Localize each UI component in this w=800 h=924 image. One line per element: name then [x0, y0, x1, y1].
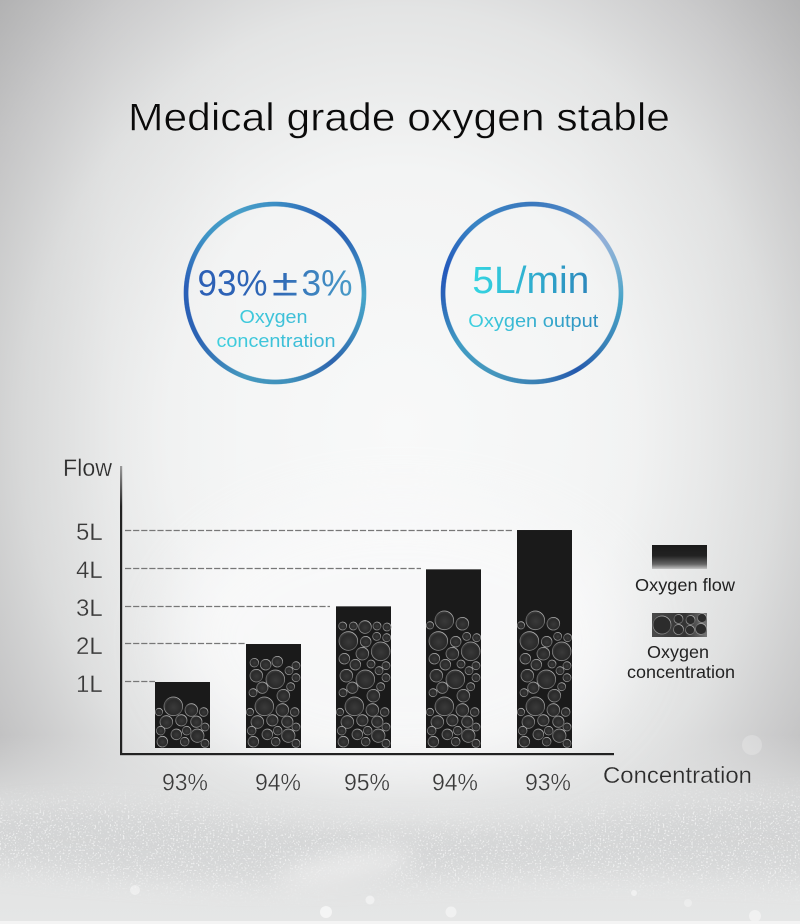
stat circle: oxygen output: Oxygen output — [468, 310, 598, 330]
stat circle: oxygen concentration — [184, 202, 366, 384]
y axis tick labels: 2L — [76, 633, 103, 660]
bar: 94% 2L — [246, 644, 301, 748]
legend: oxygen flow — [635, 545, 735, 595]
legend: oxygen concentration: concentration — [627, 662, 735, 682]
y axis tick labels — [76, 519, 103, 698]
y axis title: Flow — [63, 455, 113, 482]
title: Medical grade oxygen stable — [128, 96, 670, 140]
stat circle: oxygen output: 5L/min — [472, 260, 589, 302]
y axis tick labels: 4L — [76, 557, 103, 584]
y axis tick labels: 1L — [76, 671, 103, 698]
stat circle: oxygen concentration: Oxygen — [239, 306, 307, 326]
bar: 95% 3L — [336, 606, 391, 748]
legend: oxygen concentration — [627, 613, 735, 682]
x axis tick labels: 94% — [255, 770, 301, 796]
bar: 94% 4L — [426, 569, 481, 748]
stat circle: oxygen concentration: 93% — [197, 262, 267, 303]
bar: 93% 5L — [517, 530, 572, 748]
stat circle: oxygen output — [440, 202, 624, 384]
stat circle: oxygen concentration: concentration — [216, 330, 335, 350]
y axis tick labels: 3L — [76, 595, 103, 622]
x axis tick labels: 94% — [432, 770, 478, 796]
legend: oxygen concentration: Oxygen — [647, 642, 709, 662]
x axis tick labels: 93% — [162, 770, 208, 796]
x axis tick labels — [162, 770, 571, 796]
stat circle: oxygen concentration: 3% — [301, 262, 352, 303]
legend: oxygen flow: Oxygen flow — [635, 575, 735, 595]
bar: 93% 1L — [155, 682, 210, 748]
y axis tick labels: 5L — [76, 519, 103, 546]
x axis tick labels: 95% — [344, 770, 390, 796]
x axis title: Concentration — [603, 762, 752, 788]
x axis tick labels: 93% — [525, 770, 571, 796]
stat circle: oxygen concentration: ± — [272, 262, 298, 304]
